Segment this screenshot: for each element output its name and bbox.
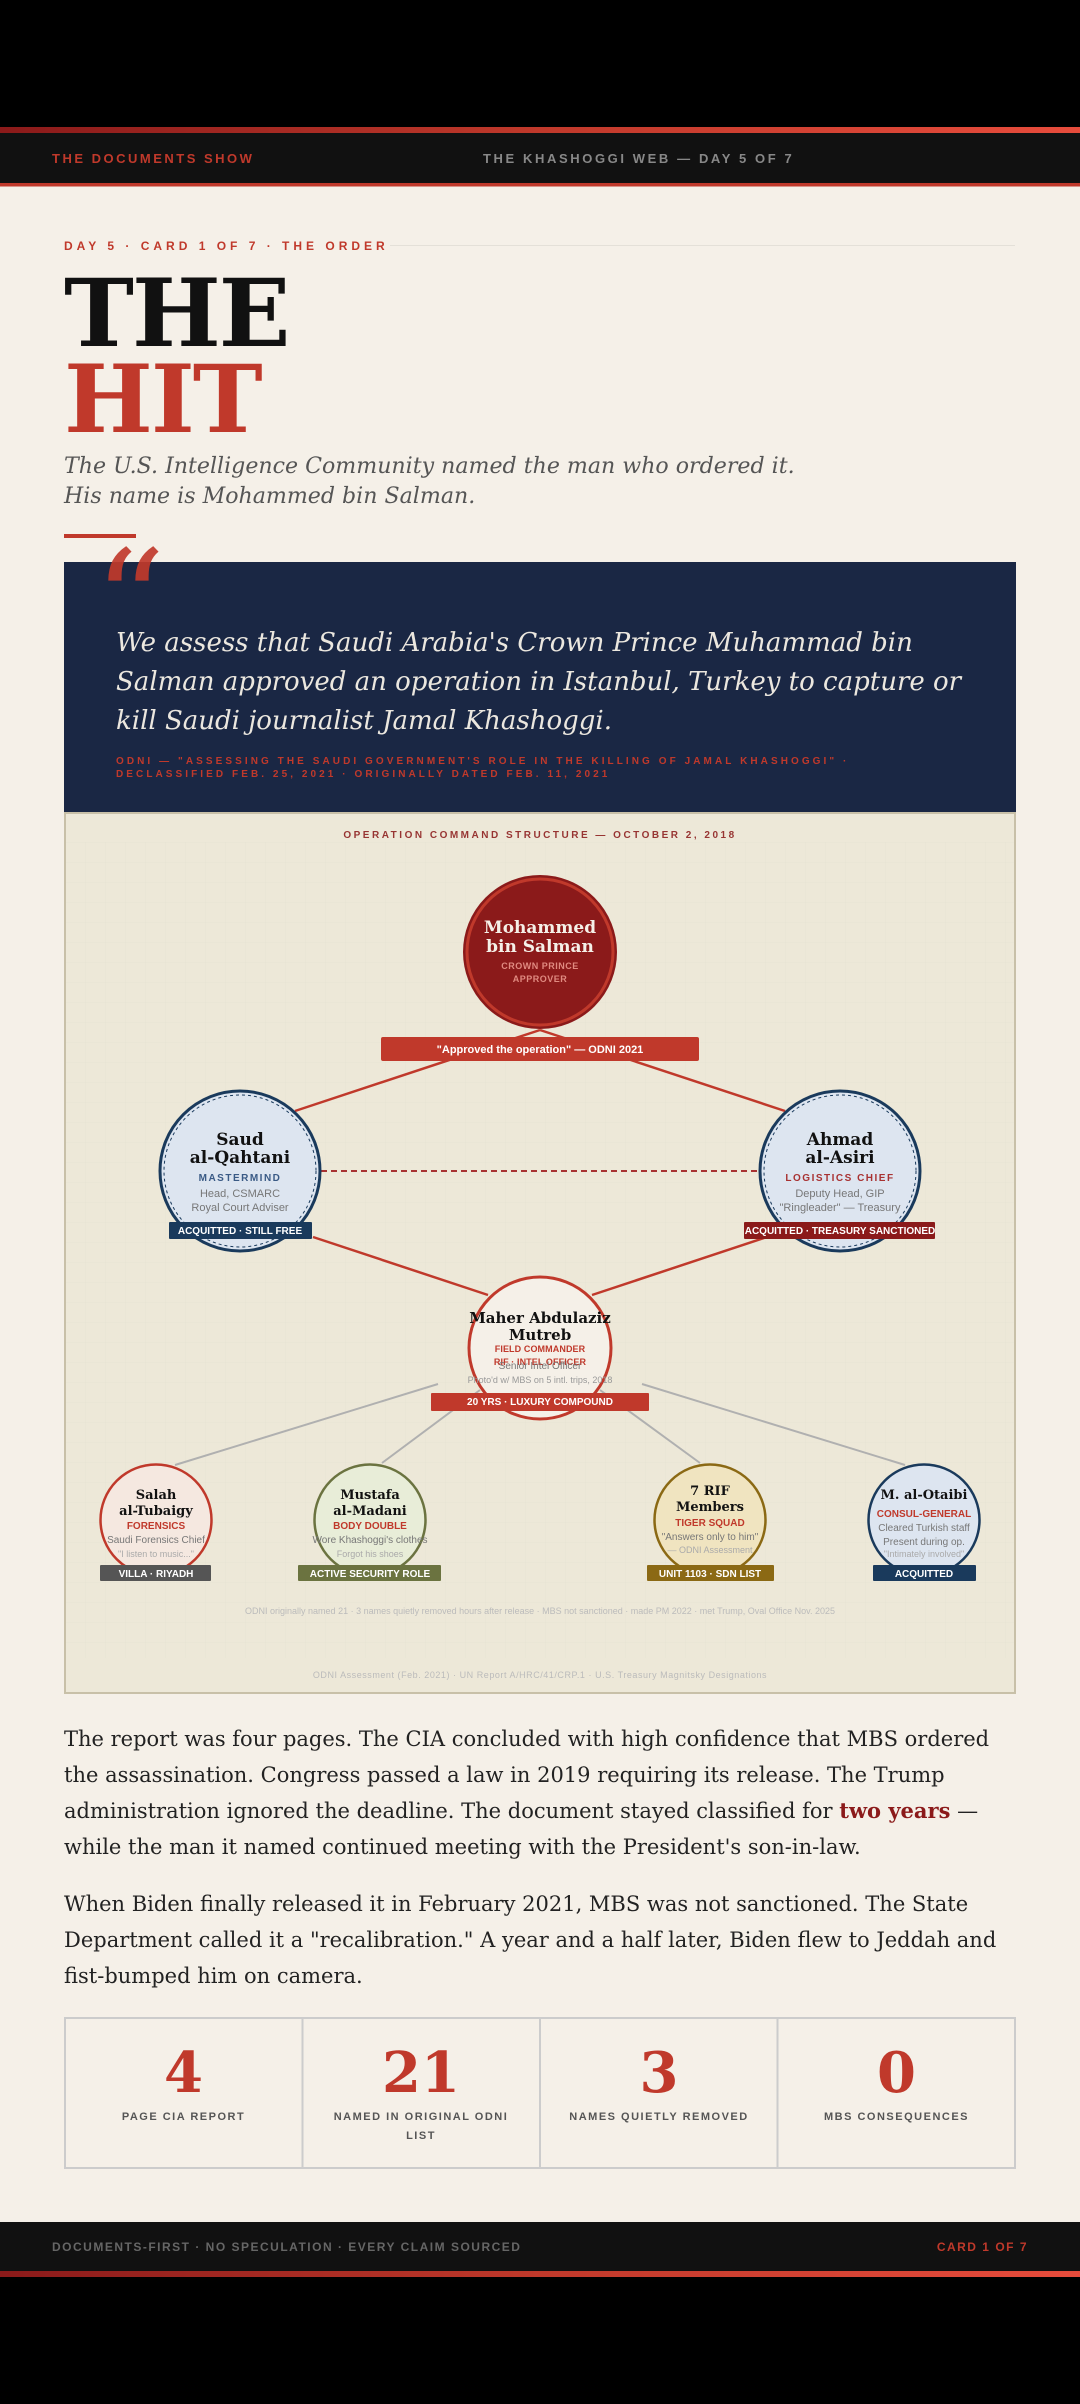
stat: 3 [569, 2040, 749, 2123]
node: 7 RIF Members: UNIT 1103 · SDN LIST [659, 1569, 761, 1580]
stat: 0 [824, 2040, 969, 2123]
node: Maher Abdulaziz Mutreb [431, 1277, 649, 1419]
node: Mustafa al-Madani: Forgot his shoes [337, 1549, 404, 1559]
body text: paragraph 1: while the man it named continued meeting with the President's son-in-law. [64, 1835, 861, 1859]
panel: command structure diagram [65, 813, 1015, 1693]
node: Saud al-Qahtani: Head, CSMARC [200, 1188, 280, 1200]
node: Salah al-Tubaigy: al-Tubaigy [119, 1504, 193, 1519]
body text: paragraph 2: Department called it a "recalibration." A year and a half later, Biden flew to Jeddah and [64, 1928, 996, 1952]
panel: stats [65, 2018, 1015, 2168]
node: Mohammed bin Salman: bin Salman [486, 937, 594, 957]
red rule [64, 534, 136, 538]
node: M. al-Otaibi: ACQUITTED [895, 1569, 953, 1580]
node: M. al-Otaibi: "Intimately involved" [884, 1549, 964, 1559]
node: 7 RIF Members [647, 1464, 774, 1581]
node: Salah al-Tubaigy: Salah [136, 1488, 177, 1503]
diagram heading: OPERATION COMMAND STRUCTURE — OCTOBER 2, 2018 [343, 830, 737, 841]
node: Maher Abdulaziz Mutreb: FIELD COMMANDER [495, 1344, 586, 1354]
node: Ahmad al-Asiri: al-Asiri [805, 1148, 875, 1168]
footer bar: DOCUMENTS-FIRST · NO SPECULATION · EVERY CLAIM SOURCED [52, 2240, 521, 2254]
node: M. al-Otaibi: Cleared Turkish staff [878, 1523, 970, 1534]
node: M. al-Otaibi [868, 1464, 980, 1581]
panel: quote [64, 521, 1016, 812]
body text: paragraph 1: The report was four pages. The CIA concluded with high confidence that MBS ordered [64, 1727, 989, 1751]
diagram sources: ODNI Assessment (Feb. 2021) · UN Report A/HRC/41/CRP.1 · U.S. Treasury Magnitsky Designations [313, 1670, 767, 1680]
subtitle [63, 453, 795, 509]
stat: 21: NAMED IN ORIGINAL ODNI [334, 2111, 508, 2123]
node: M. al-Otaibi: M. al-Otaibi [881, 1488, 968, 1503]
header bar: THE KHASHOGGI WEB — DAY 5 OF 7 [483, 151, 794, 166]
quote text [116, 628, 963, 736]
node: Ahmad al-Asiri: LOGISTICS CHIEF [785, 1173, 895, 1184]
header bar [0, 127, 1080, 186]
node: Mohammed bin Salman: CROWN PRINCE [501, 961, 579, 971]
subtitle: His name is Mohammed bin Salman. [63, 483, 475, 509]
eyebrow: DAY 5 · CARD 1 OF 7 · THE ORDER [64, 239, 389, 253]
node: Mustafa al-Madani: Mustafa [340, 1488, 400, 1503]
quote source: ODNI — "ASSESSING THE SAUDI GOVERNMENT'S ROLE IN THE KILLING OF JAMAL KHASHOGGI" · [116, 756, 849, 767]
node: M. al-Otaibi: Present during op. [883, 1537, 965, 1548]
body text: paragraph 2: When Biden finally released it in February 2021, MBS was not sanctioned. The State [64, 1892, 968, 1916]
body text: paragraph 1 [64, 1727, 989, 1859]
quote text: kill Saudi journalist Jamal Khashoggi. [116, 706, 612, 736]
node: Saud al-Qahtani [160, 1091, 320, 1251]
node: Maher Abdulaziz Mutreb: Senior Intel Officer [499, 1361, 582, 1372]
stat: 0: MBS CONSEQUENCES [824, 2111, 969, 2123]
node: Maher Abdulaziz Mutreb: Mutreb [509, 1326, 571, 1344]
node: Maher Abdulaziz Mutreb: 20 YRS · LUXURY COMPOUND [467, 1397, 613, 1408]
node: 7 RIF Members: — ODNI Assessment [667, 1545, 753, 1555]
node: Mohammed bin Salman: Mohammed [484, 918, 596, 938]
node: Mohammed bin Salman [464, 876, 616, 1028]
node: Ahmad al-Asiri: Ahmad [806, 1130, 873, 1150]
node: Mustafa al-Madani [298, 1464, 441, 1581]
node: Ahmad al-Asiri [744, 1091, 935, 1251]
node: Maher Abdulaziz Mutreb: RIF · INTEL OFFICER [494, 1357, 587, 1367]
node: Salah al-Tubaigy: Saudi Forensics Chief [107, 1535, 205, 1546]
stat: 0: 0 [877, 2040, 916, 2106]
title [64, 259, 288, 455]
node: M. al-Otaibi: CONSUL-GENERAL [877, 1509, 971, 1520]
stat: 21: LIST [406, 2130, 436, 2142]
node: Saud al-Qahtani: ACQUITTED · STILL FREE [178, 1226, 302, 1237]
node: Saud al-Qahtani: MASTERMIND [199, 1173, 281, 1184]
node: Mohammed bin Salman: APPROVER [513, 974, 567, 984]
node: Salah al-Tubaigy [100, 1464, 212, 1581]
node: 7 RIF Members: TIGER SQUAD [675, 1518, 745, 1529]
header bar: THE DOCUMENTS SHOW [52, 151, 254, 166]
node: Maher Abdulaziz Mutreb: Photo'd w/ MBS on 5 intl. trips, 2018 [468, 1375, 612, 1385]
node: Maher Abdulaziz Mutreb: Maher Abdulaziz [469, 1309, 611, 1327]
node: Salah al-Tubaigy: VILLA · RIYADH [119, 1569, 193, 1580]
node: 7 RIF Members: Members [676, 1500, 744, 1515]
node: Saud al-Qahtani: Saud [216, 1130, 264, 1150]
node: Mustafa al-Madani: al-Madani [333, 1504, 407, 1519]
node: Mustafa al-Madani: BODY DOUBLE [333, 1521, 407, 1532]
stat: 3: 3 [640, 2040, 678, 2106]
node: Saud al-Qahtani: Royal Court Adviser [191, 1202, 289, 1214]
node: 7 RIF Members: 7 RIF [690, 1484, 731, 1499]
badge: approved the operation: "Approved the operation" — ODNI 2021 [437, 1044, 643, 1056]
stat: 4: PAGE CIA REPORT [122, 2111, 245, 2123]
quote source: DECLASSIFIED FEB. 25, 2021 · ORIGINALLY DATED FEB. 11, 2021 [116, 769, 610, 780]
title: THE [64, 259, 288, 369]
body text: paragraph 2 [64, 1892, 996, 1988]
quote text: We assess that Saudi Arabia's Crown Prince Muhammad bin [116, 628, 913, 658]
icon: quote mark: “ [94, 521, 166, 684]
body text: paragraph 1: the assassination. Congress passed a law in 2019 requiring its release. The Trump [64, 1763, 945, 1787]
badge: approved the operation [381, 1037, 699, 1061]
diagram caption: ODNI originally named 21 · 3 names quietly removed hours after release · MBS not sanctioned · made PM 2022 · met Trump, Oval Office Nov. 2025 [245, 1606, 835, 1616]
connector lines [175, 1030, 905, 1465]
node: Salah al-Tubaigy: "I listen to music..." [118, 1549, 194, 1559]
node: Ahmad al-Asiri: "Ringleader" — Treasury [780, 1202, 901, 1214]
stat: 4 [122, 2040, 245, 2123]
stat: 3: NAMES QUIETLY REMOVED [569, 2111, 749, 2123]
subtitle: The U.S. Intelligence Community named the man who ordered it. [64, 453, 795, 479]
stat: 21: 21 [382, 2040, 460, 2106]
body text: paragraph 1: administration ignored the deadline. The document stayed classified for two years — [64, 1798, 978, 1823]
stat: 4: 4 [164, 2040, 203, 2106]
body text: paragraph 2: fist-bumped him on camera. [64, 1964, 363, 1988]
node: Mustafa al-Madani: Wore Khashoggi's clothes [312, 1535, 428, 1546]
node: 7 RIF Members: "Answers only to him" [662, 1532, 759, 1543]
node: Saud al-Qahtani: al-Qahtani [190, 1148, 291, 1168]
node: Ahmad al-Asiri: Deputy Head, GIP [795, 1188, 885, 1200]
node: Mustafa al-Madani: ACTIVE SECURITY ROLE [310, 1569, 431, 1580]
footer bar [0, 2222, 1080, 2277]
quote text: Salman approved an operation in Istanbul, Turkey to capture or [116, 667, 963, 697]
title: HIT [64, 345, 262, 455]
footer bar: CARD 1 OF 7 [937, 2240, 1028, 2254]
stat: 21 [334, 2040, 508, 2142]
node: Ahmad al-Asiri: ACQUITTED · TREASURY SANCTIONED [745, 1226, 935, 1237]
quote source [116, 756, 849, 780]
node: Salah al-Tubaigy: FORENSICS [127, 1521, 185, 1532]
